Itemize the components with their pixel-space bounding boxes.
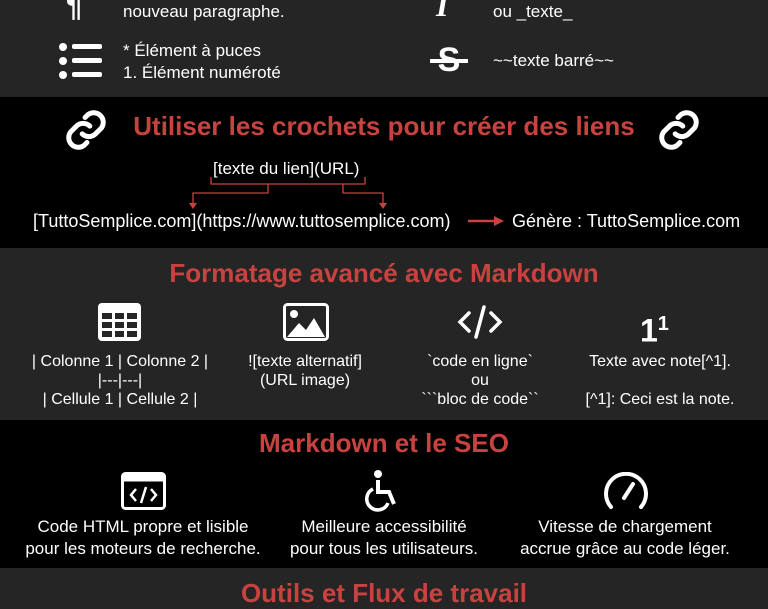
text: image: (URL image): [260, 372, 350, 389]
text: list: * Élément à puces: [123, 41, 261, 60]
icon: strikethrough: [430, 41, 468, 79]
icon: speedometer: [604, 472, 648, 510]
panel: tools: [0, 568, 768, 600]
icon: strikethrough: S: [438, 41, 460, 79]
heading: advanced: Formatage avancé avec Markdown: [169, 258, 599, 288]
text: SEO speed: accrue grâce au code léger.: [520, 539, 730, 558]
text: italic: ou _texte_: [493, 2, 572, 21]
text: SEO html: [25, 517, 261, 558]
text: list: 1. Élément numéroté: [123, 63, 281, 82]
icon: browser code: [121, 472, 166, 510]
text: SEO accessibility: [290, 517, 478, 558]
icon: footnote: 11: [640, 313, 669, 349]
text: table: [32, 353, 208, 408]
text: SEO accessibility: Meilleure accessibilité: [301, 517, 467, 536]
panel: links: [0, 97, 768, 248]
panel: advanced formatting: [0, 248, 768, 420]
text: SEO speed: Vitesse de chargement: [538, 517, 712, 536]
text: link example: [TuttoSemplice.com](https://www.tuttosemplice.com): [33, 211, 450, 231]
text: image: [248, 353, 362, 389]
text: list: [123, 41, 281, 82]
text: footnote: [^1]: Ceci est la note.: [586, 391, 734, 408]
heading: tools: Outils et Flux de travail: [241, 578, 527, 608]
text: SEO html: pour les moteurs de recherche.: [25, 539, 261, 558]
text: footnote: Texte avec note[^1].: [589, 353, 731, 370]
diagram: bracket arrows: [189, 177, 504, 226]
panel: SEO: [0, 420, 768, 568]
text: strikethrough: ~~texte barré~~: [493, 51, 614, 70]
text: code: ```bloc de code``: [421, 391, 539, 408]
icon: image: [283, 303, 329, 341]
icon: link right: [659, 110, 699, 150]
text: SEO speed: [520, 517, 730, 558]
text: code: `code en ligne`: [427, 353, 533, 370]
text: footnote: [586, 353, 734, 408]
text: image: ![texte alternatif]: [248, 353, 362, 370]
panel: basic syntax: [0, 0, 768, 97]
icon: accessibility: [365, 470, 396, 512]
icon: code: [458, 305, 502, 339]
icon: link left: [66, 110, 106, 150]
text: table: | Cellule 1 | Cellule 2 |: [43, 391, 197, 408]
icon: table: [98, 303, 141, 341]
text: SEO accessibility: pour tous les utilisateurs.: [290, 539, 478, 558]
text: table: | Colonne 1 | Colonne 2 |: [32, 353, 208, 370]
text: result: Génère : TuttoSemplice.com: [512, 211, 740, 231]
heading: SEO: Markdown et le SEO: [259, 428, 509, 458]
heading: links: Utiliser les crochets pour créer des liens: [133, 111, 635, 141]
icon: list: [59, 43, 102, 79]
text: table: |---|---|: [98, 372, 142, 389]
text: SEO html: Code HTML propre et lisible: [37, 517, 249, 536]
text: code: [421, 353, 539, 408]
text: paragraph: nouveau paragraphe.: [123, 2, 285, 21]
text: link syntax: [texte du lien](URL): [213, 159, 359, 178]
text: code: ou: [471, 372, 489, 389]
